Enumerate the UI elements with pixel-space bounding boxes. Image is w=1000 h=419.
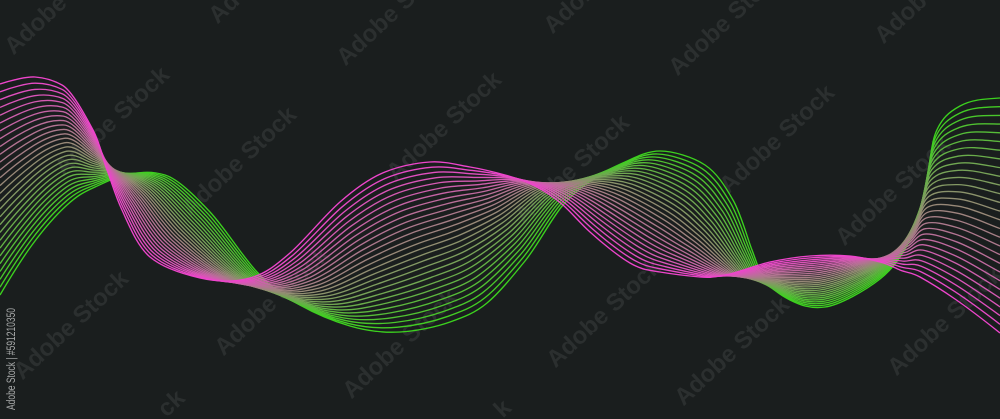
watermark: repeated diagonal Adobe Stock text: Adobe Stock	[830, 131, 956, 251]
watermark: repeated diagonal Adobe Stock text: Adobe Stock	[8, 265, 134, 385]
watermark: repeated diagonal Adobe Stock text: Adobe Stock	[669, 291, 795, 411]
wave: blended line ribbon from green to pink	[0, 77, 1000, 333]
watermark: repeated diagonal Adobe Stock text: Adobe Stock	[509, 109, 635, 229]
watermark: repeated diagonal Adobe Stock text: Adobe Stock	[714, 79, 840, 199]
stock id label: Adobe Stock | #591210350	[6, 308, 18, 410]
watermark: repeated diagonal Adobe Stock text: Adobe Stock	[49, 61, 175, 181]
watermark: repeated diagonal Adobe Stock text: Adobe Stock	[381, 66, 507, 186]
watermark: repeated diagonal Adobe Stock text: Adobe Stock	[337, 284, 463, 404]
watermark: repeated diagonal Adobe Stock text: Adobe Stock	[209, 241, 335, 361]
watermark: repeated diagonal Adobe Stock text: Adobe Stock	[541, 253, 667, 373]
watermark: repeated diagonal Adobe Stock text: Adobe Stock	[176, 101, 302, 221]
